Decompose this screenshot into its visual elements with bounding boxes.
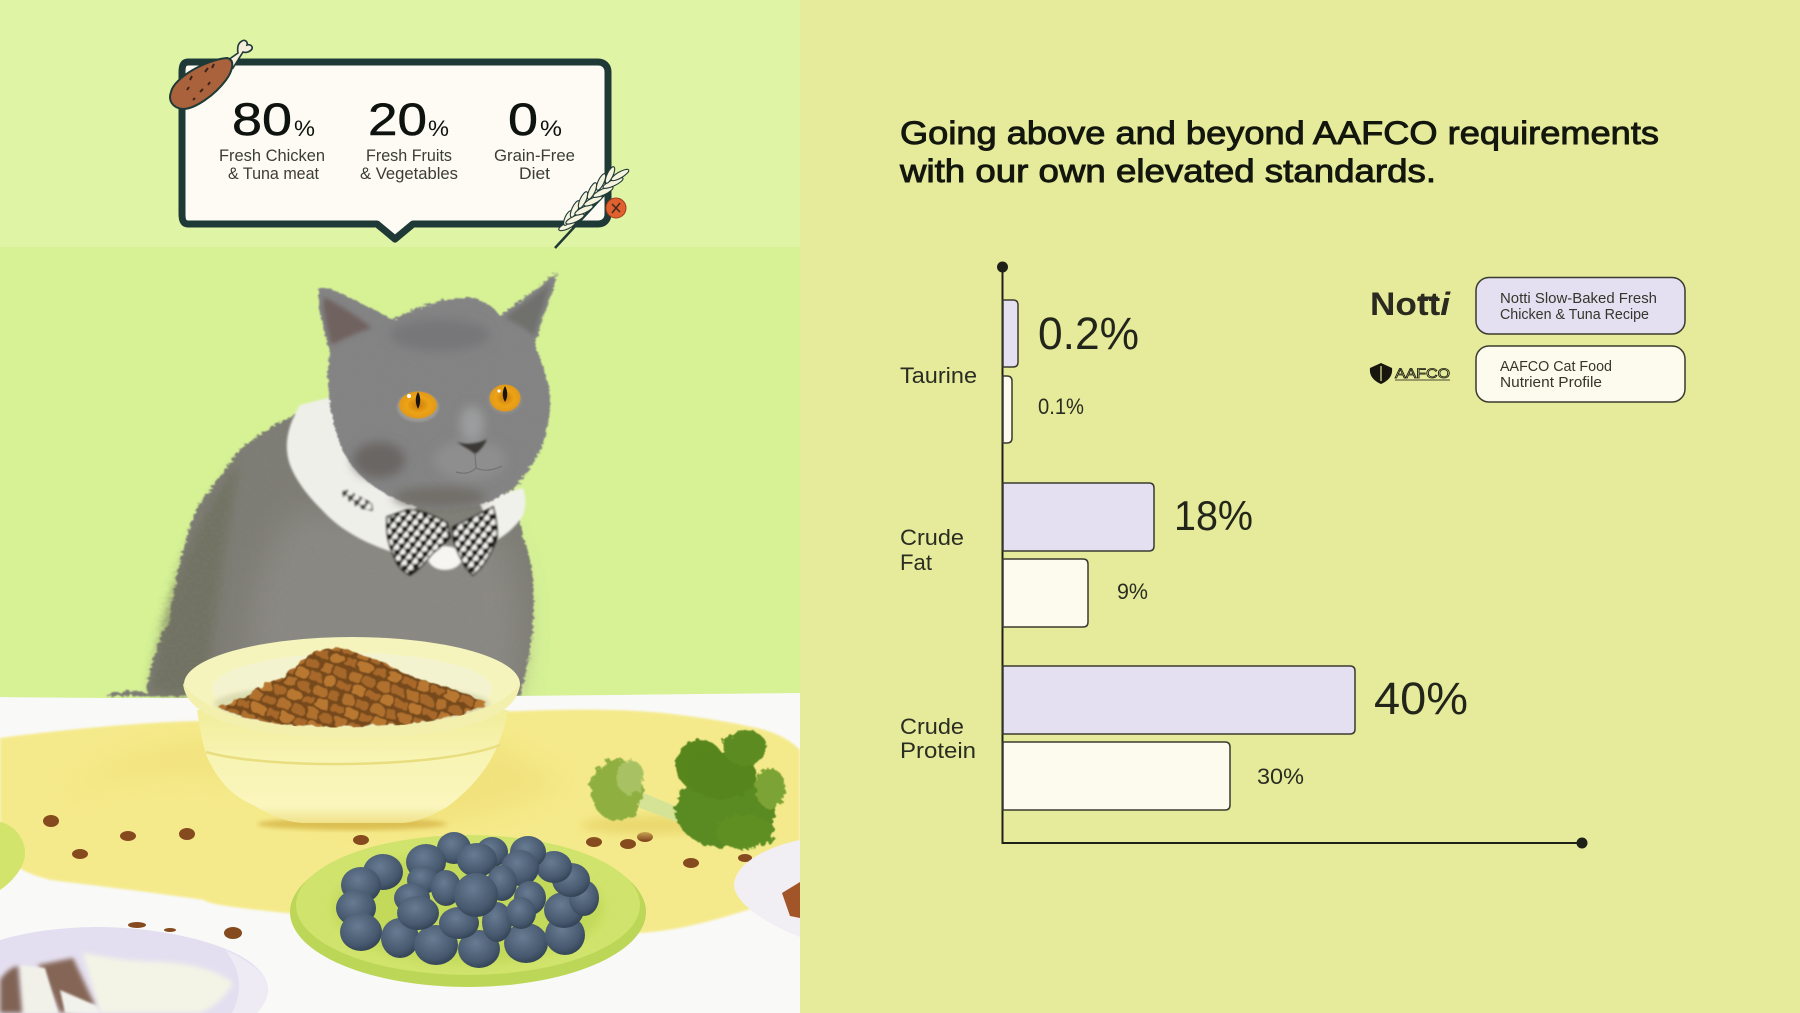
right edge white plate [734, 840, 800, 937]
stat: 20 percent: % [428, 116, 449, 141]
blueberry plate [290, 832, 646, 987]
cat [105, 272, 557, 697]
stat: 20 percent: Fresh Fruits [366, 147, 452, 165]
group: Taurine [900, 300, 1139, 443]
stat: 80 percent: & Tuna meat [228, 165, 319, 183]
bar chart [900, 262, 1588, 848]
group: Crude Fat: Crude [900, 525, 964, 550]
cat nose [457, 439, 487, 454]
collar pattern patch [342, 487, 373, 511]
group: Taurine: 0.2% [1038, 308, 1139, 359]
stat: 80 percent [219, 94, 325, 183]
cat ears [324, 297, 372, 345]
heading [899, 115, 1659, 189]
stat: 0 percent: % [540, 116, 562, 141]
blueberries [336, 832, 599, 968]
group: Crude Protein: Protein [900, 738, 976, 763]
group: Crude Fat: 18% [1174, 492, 1253, 539]
left edge green plate [0, 822, 25, 890]
group: Crude Fat [900, 483, 1253, 627]
stat: 80 percent: 80 [232, 94, 292, 145]
group: Crude Protein: Crude [900, 714, 964, 739]
group: Crude Fat: Fat [900, 550, 932, 575]
stat: 0 percent: Diet [519, 165, 550, 183]
stat: 20 percent [360, 94, 458, 183]
legend: AAFCO profile [1476, 346, 1685, 402]
legend: AAFCO profile: AAFCO Cat Food [1500, 358, 1612, 375]
legend: Notti recipe: Chicken & Tuna Recipe [1500, 306, 1649, 323]
panel: photo of cat with food [0, 0, 800, 1013]
food bowl [183, 637, 520, 830]
callout: composition stats [170, 40, 630, 248]
group: Crude Protein: 30% [1257, 764, 1304, 789]
cat cheek shading [353, 442, 405, 478]
group: Crude Fat: 9% [1117, 579, 1148, 604]
heading: Going above and beyond AAFCO requirements [900, 115, 1659, 151]
cat left eye [397, 392, 439, 422]
stat: 0 percent: Grain-Free [494, 147, 575, 165]
legend: Notti recipe: Notti Slow-Baked Fresh [1500, 290, 1657, 307]
logo: AAFCO [1370, 363, 1450, 384]
cat right eye [488, 384, 522, 414]
stat: 80 percent: % [294, 116, 315, 141]
legend: Notti recipe [1476, 278, 1685, 334]
photo backdrop wall [0, 247, 800, 707]
heading: with our own elevated standards. [899, 153, 1436, 189]
broccoli [580, 730, 785, 849]
cat bow tie [387, 507, 497, 575]
stat: 0 percent: 0 [508, 94, 538, 145]
stat: 20 percent: 20 [368, 94, 427, 145]
lavender plate with food [0, 927, 268, 1013]
cat head [318, 272, 557, 510]
table cloth [0, 693, 800, 1013]
logo: Notti: Notti [1370, 286, 1451, 322]
callout speech bubble [182, 62, 608, 239]
cat collar [287, 395, 525, 552]
group: Crude Protein: 40% [1374, 673, 1468, 724]
group: Taurine: 0.1% [1038, 394, 1084, 419]
legend: AAFCO profile: Nutrient Profile [1500, 374, 1602, 391]
cat body fur grain [147, 412, 534, 697]
icon: chicken drumstick [170, 40, 252, 109]
stat: 20 percent: & Vegetables [360, 165, 458, 183]
group: Taurine: Taurine [900, 363, 977, 388]
group: Crude Protein [900, 666, 1468, 810]
stat: 0 percent [494, 94, 575, 183]
icon: grain with cross [555, 166, 630, 248]
legend [1370, 278, 1685, 402]
cat body [105, 412, 534, 697]
placemat tray [0, 710, 800, 933]
stat: 80 percent: Fresh Chicken [219, 147, 325, 165]
logo: AAFCO: AAFCO [1395, 365, 1450, 381]
photo backdrop upper band [0, 0, 800, 248]
chart axes [997, 262, 1588, 848]
kibbles scattered [43, 815, 752, 939]
panel: chart background [800, 0, 1800, 1013]
